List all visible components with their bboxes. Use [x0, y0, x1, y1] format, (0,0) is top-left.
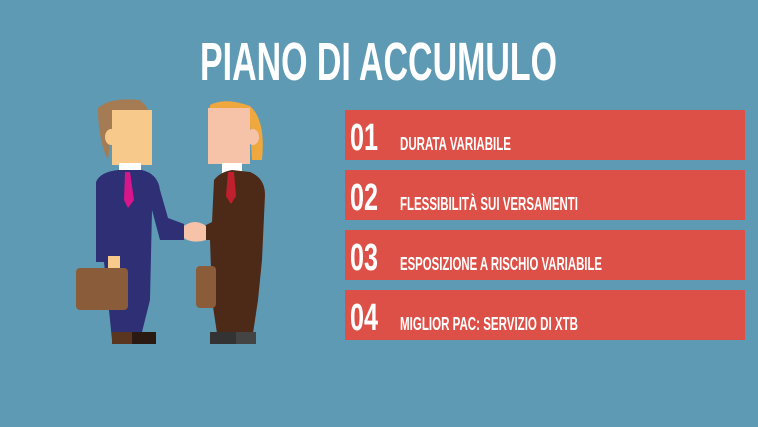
item 03: ESPOSIZIONE A RISCHIO VARIABILE — [400, 254, 602, 274]
person right: brown suit — [184, 101, 265, 344]
item 04: 04 — [350, 297, 378, 339]
item 04: MIGLIOR PAC: SERVIZIO DI XTB — [400, 314, 578, 334]
item 02: FLESSIBILITÀ SUI VERSAMENTI — [400, 193, 578, 214]
title: PIANO DI ACCUMULO — [200, 32, 557, 92]
item 02 — [345, 170, 745, 220]
item 02: 02 — [350, 177, 378, 219]
person left: blue suit — [76, 99, 184, 344]
item 01: DURATA VARIABILE — [400, 134, 511, 154]
item 03: 03 — [350, 237, 378, 279]
item 04 — [345, 290, 745, 340]
item 03 — [345, 230, 745, 280]
illustration: handshake — [76, 99, 265, 344]
item 01: 01 — [350, 117, 378, 159]
item 01 — [345, 110, 745, 160]
